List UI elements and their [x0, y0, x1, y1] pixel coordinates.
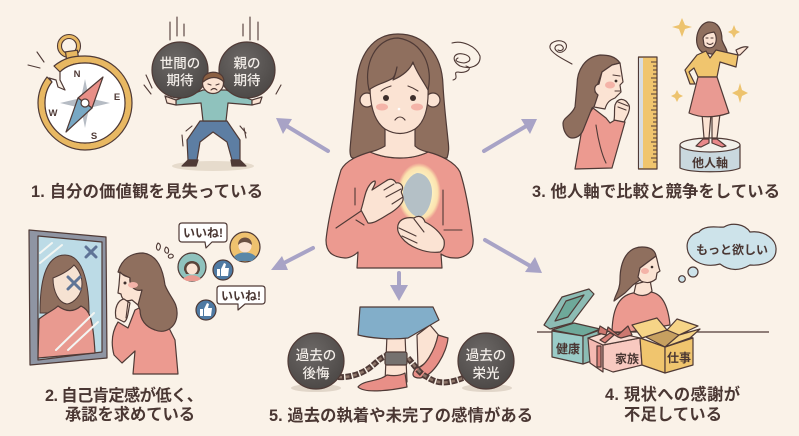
icon: face	[370, 62, 428, 134]
icon: ears	[360, 93, 440, 107]
heading 4	[605, 385, 740, 424]
arrow: to item 1	[276, 118, 328, 151]
heading 2: 2. 自己肯定感が低く、	[45, 386, 203, 405]
icon: man holding weights: 世間の	[160, 56, 200, 71]
pedestal label: 他人軸	[692, 155, 728, 170]
icon: ball past glory	[458, 333, 514, 389]
icon: thought cloud	[679, 224, 776, 282]
icon: sad facial features	[376, 86, 423, 120]
icon: neck	[370, 128, 428, 158]
icon: lower hand	[398, 216, 444, 252]
heading 4: 4. 現状への感謝が	[605, 385, 740, 404]
heading 1: 1. 自分の価値観を見失っている	[31, 182, 263, 201]
panel: 4 lack of gratitude	[537, 224, 776, 424]
icon: thought cloud: もっと欲しい	[696, 242, 768, 257]
icon: gift box family	[588, 326, 642, 372]
panel: 2 low self esteem	[29, 223, 265, 424]
arrow: to item 2	[271, 248, 313, 270]
panel: 1 losing values	[28, 17, 281, 201]
icon: ankle cuff	[385, 352, 407, 365]
callout: like bubble upper	[179, 223, 227, 248]
arrow: to item 5	[390, 273, 408, 301]
icon: upper hand	[361, 179, 403, 223]
icon: broken compass: S	[91, 131, 97, 142]
heading 2	[45, 386, 203, 424]
icon: ball past regret: 後悔	[302, 366, 330, 381]
heading 3: 3. 他人軸で比較と競争をしている	[532, 182, 780, 201]
icon: worried woman in profile	[112, 243, 178, 374]
icon: ball past regret	[288, 333, 344, 389]
icon: orange avatar	[230, 232, 260, 262]
icon: ball shadows	[291, 384, 512, 392]
icon: ball past glory: 栄光	[472, 366, 500, 381]
icon: pedestal	[680, 138, 740, 172]
panel: 5 past attachments	[269, 307, 533, 425]
icon: man holding weights: 期待	[166, 73, 194, 88]
icon: man holding weights: 期待	[234, 73, 261, 88]
icon: right forearm crease	[336, 188, 462, 230]
callout: like bubble lower: いいね!	[221, 289, 261, 303]
icon: sparkles	[671, 18, 748, 103]
icon: man holding weights	[144, 17, 281, 171]
icon: chains	[338, 356, 463, 382]
icon: finger lines	[384, 184, 424, 243]
icon: sweater body	[326, 152, 473, 268]
heading 5: 5. 過去の執着や未完了の感情がある	[269, 406, 533, 425]
panel: central woman	[326, 34, 480, 268]
icon: man holding weights: 親の	[234, 56, 260, 71]
icon: broken compass: W	[49, 108, 58, 119]
icon: broken compass: N	[74, 69, 81, 80]
icon: woman looking away	[612, 247, 670, 335]
arrow: to item 3	[484, 119, 537, 151]
icon: thumbs up lower	[196, 300, 216, 320]
icon: fringe	[368, 38, 429, 90]
icon: teal box health	[544, 289, 600, 364]
icon: ruler	[638, 57, 657, 169]
icon: broken compass	[28, 34, 132, 150]
icon: worry scribble	[452, 42, 480, 80]
icon: teal box health: 健康	[556, 341, 580, 356]
icon: legs and shoes	[358, 325, 448, 391]
panel: 3 comparing with others	[532, 18, 780, 201]
icon: gift box family: 家族	[615, 351, 639, 366]
callout: like bubble lower	[217, 286, 265, 310]
icon: broken compass: E	[114, 92, 120, 103]
icon: confident woman	[685, 22, 748, 147]
table line	[537, 331, 769, 333]
icon: thinking woman	[550, 41, 629, 169]
callout: like bubble upper: いいね!	[183, 226, 223, 240]
arrow: to item 4	[485, 240, 542, 273]
icon: back hair	[350, 34, 449, 158]
icon: teal avatar	[178, 253, 206, 281]
icon: thumbs up upper	[213, 260, 233, 280]
icon: glowing hollow in chest	[397, 163, 441, 223]
heading 2: 承認を求めている	[65, 405, 195, 424]
icon: cardboard box work	[632, 318, 700, 373]
icon: ball past regret: 過去の	[296, 348, 336, 363]
icon: cardboard box work: 仕事	[667, 350, 691, 365]
heading 4: 不足している	[624, 406, 722, 424]
icon: mirror	[29, 230, 107, 365]
icon: ball past glory: 過去の	[466, 348, 506, 363]
icon: skirt	[358, 307, 439, 339]
